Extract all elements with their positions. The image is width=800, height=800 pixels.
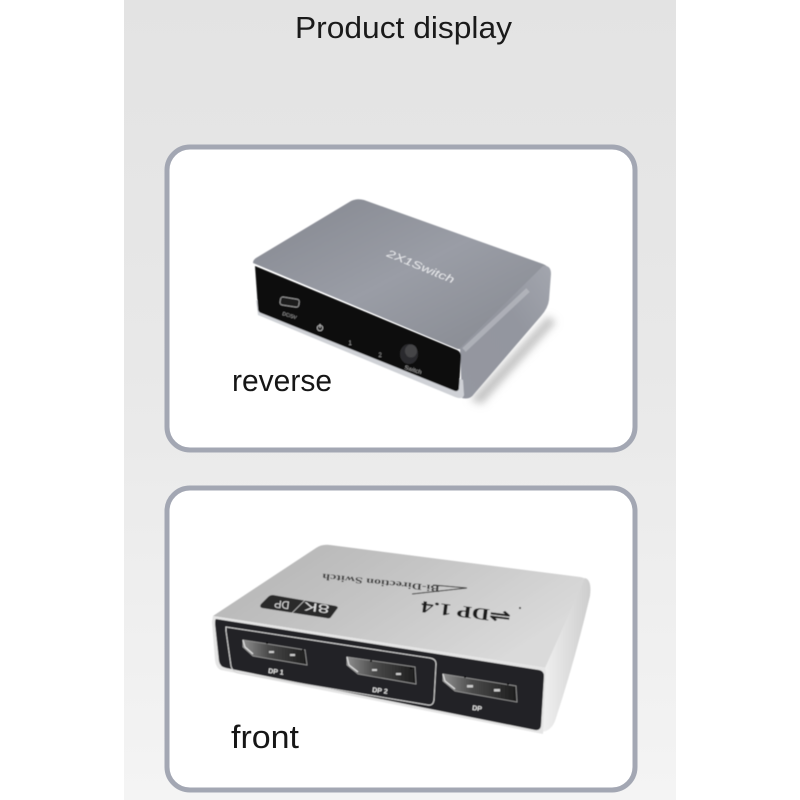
port: DP [443,674,517,702]
port label: DP: DP [472,705,483,713]
top label dot [519,607,521,609]
power icon [317,324,323,331]
device front face [215,619,544,730]
port label: DC/5V [281,311,298,321]
device shadow [470,316,556,404]
top label swoosh [412,585,467,594]
device front face [255,266,461,391]
micro USB port [280,297,300,308]
device front rim [212,616,546,734]
top label: DP 1.4: ⇌DP 1.4 [419,597,511,627]
badge: 8K DP 1.4: DP [274,597,290,611]
device label: 2X1Switch [384,247,456,286]
switch button [400,344,418,364]
label: reverse: reverse [232,363,332,398]
side highlight [464,290,528,350]
device bottom lip [256,300,464,398]
port: DP 2 [347,657,416,684]
panel: front [167,488,635,790]
device top face [213,545,588,668]
LED number 2: 2 [378,353,382,359]
device top face [253,199,548,349]
badge: 8K DP 1.4 [260,595,338,618]
LED number 1: 1 [348,341,352,347]
port: DP 1 [243,640,307,665]
port group outline [226,627,436,705]
switch label: Switch [403,365,422,376]
device: DP switch front view [212,545,590,734]
device: 2x1 switch rear view [253,199,556,404]
port label: DP 1: DP 1 [268,668,284,677]
top label: Bi-Direction Switch: Bi-Direction Switch [322,572,440,594]
device right side [540,578,590,732]
title: Product display [295,10,513,45]
badge: 8K DP 1.4: 8K [303,599,330,616]
device right side [460,266,551,398]
port label: DP 2: DP 2 [372,687,388,696]
panel: reverse [167,147,635,450]
label: front: front [231,719,299,755]
background panel [124,0,676,800]
